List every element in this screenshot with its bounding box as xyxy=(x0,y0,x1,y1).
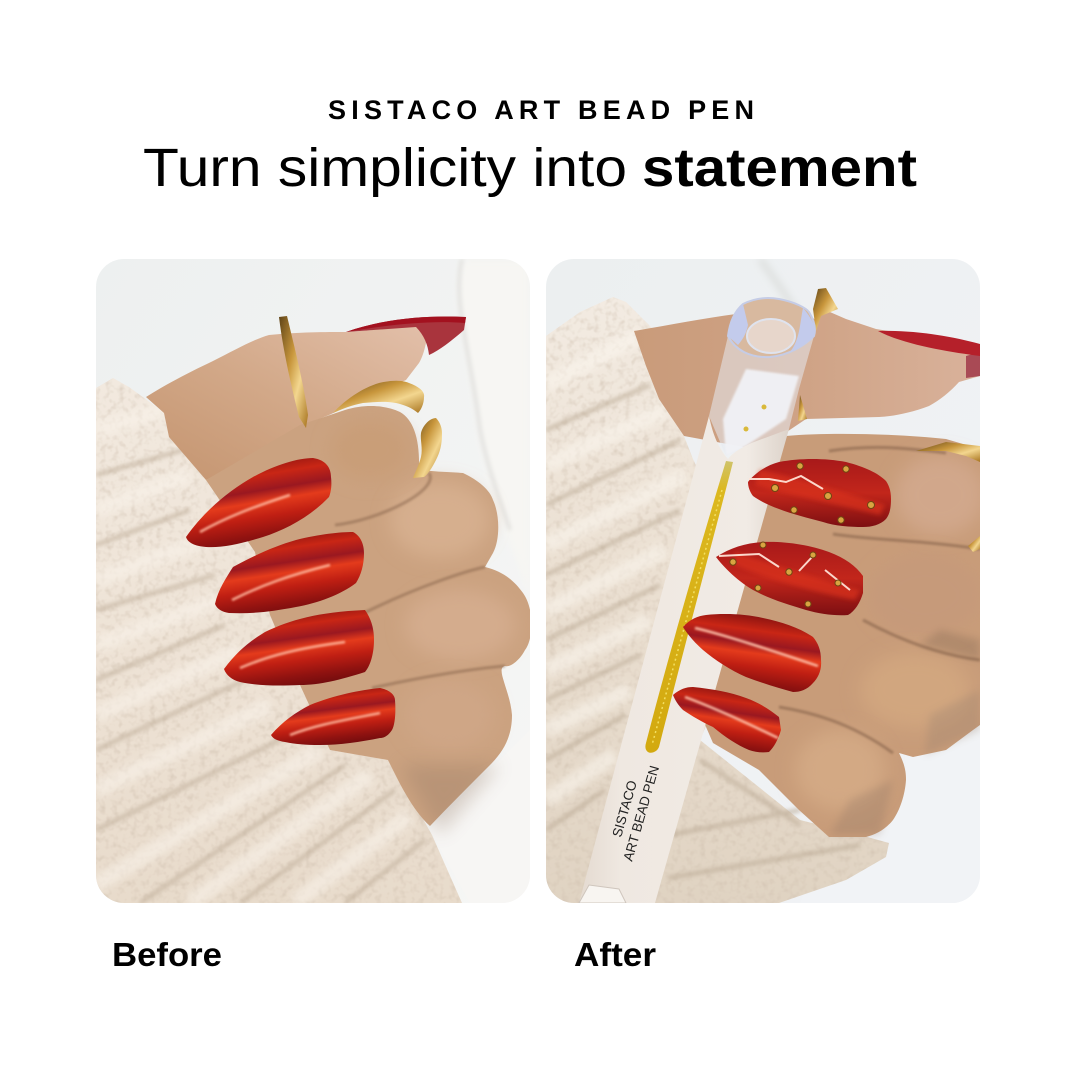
hand xyxy=(634,309,985,837)
gold rings xyxy=(798,288,980,552)
gold beads xyxy=(730,463,874,607)
label: before: Before xyxy=(112,936,222,973)
red nails xyxy=(186,458,395,745)
eyebrow heading: SISTACO ART BEAD PEN xyxy=(328,95,754,125)
panel: after photo xyxy=(546,259,985,903)
main title: Turn simplicity into xyxy=(143,138,627,198)
hand xyxy=(146,327,532,835)
panel: before photo xyxy=(96,259,532,903)
thumb nail xyxy=(346,316,466,355)
main title: statement xyxy=(642,138,917,198)
red nails with gold beads xyxy=(673,459,891,752)
yellow bead strip xyxy=(645,461,733,753)
sweater sleeve xyxy=(96,378,462,903)
thumb nail xyxy=(878,331,980,378)
main title xyxy=(143,138,917,198)
pen label: SISTACO xyxy=(609,779,640,839)
sweater sleeve xyxy=(546,297,889,903)
label: after: After xyxy=(574,936,656,973)
gold rings xyxy=(279,316,442,478)
product: art bead pen: ART BEAD PEN xyxy=(620,764,662,863)
clear cap xyxy=(709,298,815,456)
product: art bead pen xyxy=(579,298,815,903)
pen body xyxy=(579,416,789,903)
